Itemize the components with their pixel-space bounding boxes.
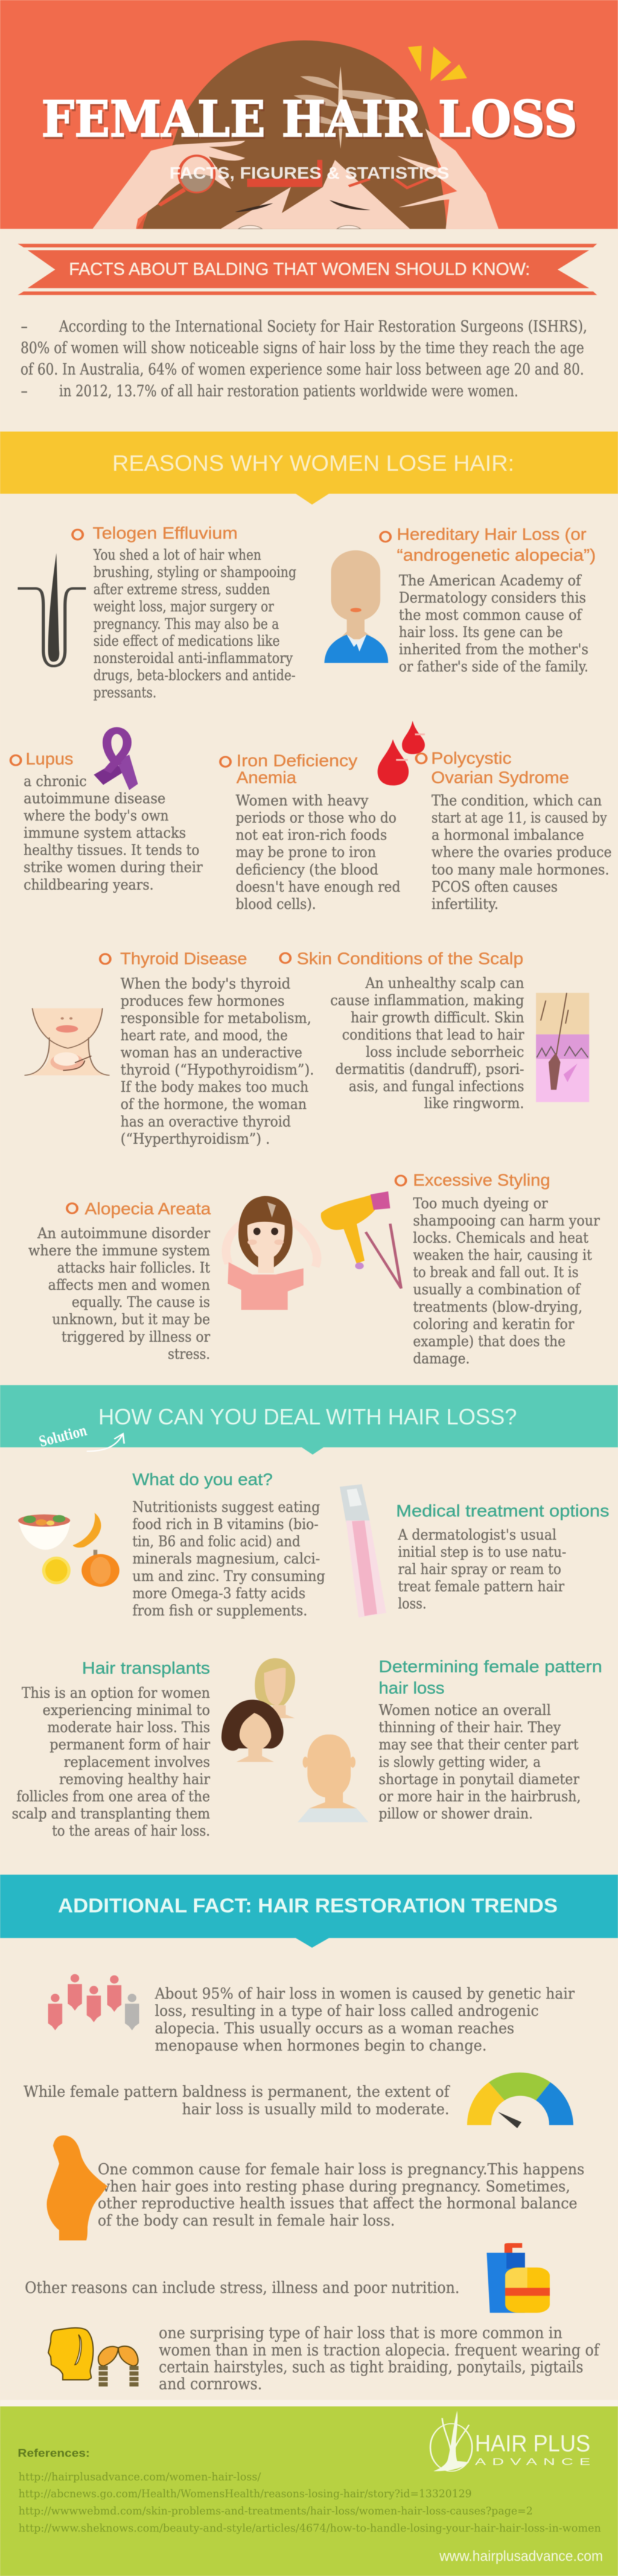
solution: hair transplants: permanent form of hair <box>49 1736 211 1753</box>
reason: thyroid disease: has an overactive thyroid <box>121 1114 291 1130</box>
subtitle: FACTS, FIGURES & STATISTICS <box>170 164 449 183</box>
solution: what do you eat: from fish or supplements. <box>132 1602 307 1619</box>
solution: hair transplants: This is an option for women <box>22 1685 210 1701</box>
solution: medical treatment options: A dermatologist's usual <box>398 1526 556 1543</box>
reason: excessive styling <box>396 1170 600 1367</box>
fact: pattern baldness <box>24 2083 450 2118</box>
reason: lupus: strike women during their <box>24 859 203 876</box>
reason: skin conditions of the scalp: like ringworm. <box>424 1095 524 1112</box>
footer panel <box>0 2400 618 2576</box>
reason: alopecia areata <box>28 1199 211 1362</box>
reason: alopecia areata: stress. <box>168 1346 210 1362</box>
icon: hair dryer and straightener <box>321 1191 401 1289</box>
reason: skin conditions of the scalp: hair growth difficult. Skin <box>351 1009 524 1026</box>
reason: iron deficiency anemia: blood cells). <box>235 896 316 913</box>
reason: skin conditions of the scalp: loss include seborrheic <box>366 1044 524 1060</box>
reference links: http://hairplusadvance.com/women-hair-loss/ <box>19 2470 261 2483</box>
reason: polycystic ovarian syndrome: PCOS often causes <box>432 879 558 895</box>
reason: telogen effluvium: Telogen Effluvium <box>92 523 238 542</box>
reason: lupus: childbearing years. <box>24 876 154 893</box>
icon: blood drops <box>378 721 425 785</box>
solution: hair transplants: scalp and transplanting them <box>12 1805 210 1822</box>
reason: alopecia areata: An autoimmune disorder <box>37 1225 211 1242</box>
logo: hair plus advance <box>430 2411 590 2471</box>
reason: telogen effluvium <box>72 523 296 701</box>
solution: hair transplants: to the areas of hair loss. <box>52 1823 210 1840</box>
reason: alopecia areata: where the immune system <box>28 1242 210 1259</box>
fact: traction alopecia: and cornrows. <box>159 2375 262 2393</box>
reason: alopecia areata: unknown, but it may be <box>52 1311 210 1328</box>
banner: facts about balding <box>18 244 597 295</box>
reason: alopecia areata: affects men and women <box>48 1277 210 1293</box>
icon: bald woman <box>324 550 388 663</box>
illustration: woman inspecting her scalp <box>92 40 499 229</box>
solution: what do you eat <box>132 1470 325 1619</box>
reason: thyroid disease: (“Hyperthyroidism”) . <box>121 1130 270 1147</box>
fact: genetic hair loss <box>154 1985 575 2055</box>
solution: hair transplants: follicles from one area of the <box>16 1788 210 1805</box>
solution: medical treatment options <box>396 1501 610 1612</box>
reason: iron deficiency anemia: periods or those who do <box>235 809 397 826</box>
reason: thyroid disease: responsible for metabolism, <box>121 1010 311 1027</box>
section band: reasons: REASONS WHY WOMEN LOSE HAIR: <box>112 451 514 476</box>
reason: polycystic ovarian syndrome: infertility. <box>432 896 499 913</box>
reason: telogen effluvium: after extreme stress, sudden <box>94 581 270 598</box>
reason: lupus: where the body's own <box>24 808 168 824</box>
solution: hair transplants: replacement involves <box>64 1754 210 1770</box>
text: balding facts: - <box>21 383 28 400</box>
section band: how to deal <box>0 1385 618 1455</box>
solution: hair transplants: removing healthy hair <box>59 1771 211 1788</box>
solution: what do you eat: Nutritionists suggest eating <box>132 1499 320 1516</box>
icon: worried woman <box>226 1196 317 1310</box>
solution: determining female pattern hair loss <box>379 1657 602 1822</box>
reason: telogen effluvium: weight loss, major surgery or <box>94 598 274 615</box>
solution: what do you eat: food rich in B vitamins (bio- <box>132 1516 319 1533</box>
reason: lupus: Lupus <box>25 749 73 768</box>
icon: shampoo bottles <box>486 2243 550 2313</box>
reason: telogen effluvium: pregnancy. This may also be a <box>94 616 279 633</box>
reason: thyroid disease: woman has an underactive <box>121 1044 302 1061</box>
reason: iron deficiency anemia: Women with heavy <box>235 792 369 809</box>
text: balding facts <box>21 318 587 400</box>
reason: alopecia areata: triggered by illness or <box>62 1328 211 1345</box>
reason: iron deficiency anemia <box>220 751 400 913</box>
reason: skin conditions of the scalp: dermatitis (dandruff), psori- <box>336 1061 524 1078</box>
reason: telogen effluvium: side effect of medications like <box>94 633 280 649</box>
reason: alopecia areata: attacks hair follicles. It <box>57 1260 210 1277</box>
reference links <box>19 2470 601 2534</box>
solution: determining female pattern hair loss: Women notice an overall <box>379 1702 551 1719</box>
solution: what do you eat: more Omega-3 fatty acids <box>132 1585 305 1602</box>
reason: thyroid disease: of the hormone, the woman <box>121 1096 307 1113</box>
icon: pregnant silhouette <box>46 2135 107 2240</box>
reason: iron deficiency anemia: doesn't have enough red <box>235 879 400 895</box>
reason: telogen effluvium: brushing, styling or shampooing <box>94 564 296 581</box>
solution: hair transplants: moderate hair loss. This <box>47 1719 210 1736</box>
fact: pregnancy <box>98 2161 584 2230</box>
solution: hair transplants: Hair transplants <box>82 1659 210 1677</box>
reason: iron deficiency anemia: Iron Deficiency <box>237 751 358 770</box>
icon: neck with thyroid <box>24 1008 110 1076</box>
icon: treatment bottle <box>340 1484 386 1618</box>
reason: skin conditions of the scalp: cause inflammation, making <box>330 992 524 1009</box>
reason: thyroid disease: produces few hormones <box>121 993 284 1009</box>
references heading: References: <box>18 2447 90 2460</box>
reason: iron deficiency anemia: not eat iron-rich foods <box>235 827 387 844</box>
text: balding facts: - <box>21 318 28 336</box>
reason: alopecia areata: equally. The cause is <box>72 1294 210 1311</box>
reason: thyroid disease: If the body makes too much <box>121 1079 308 1095</box>
reason: hereditary hair loss <box>380 524 596 675</box>
reason: polycystic ovarian syndrome: Ovarian Sydrome <box>431 768 569 786</box>
reason: skin conditions of the scalp: asis, and fungal infections <box>349 1078 524 1095</box>
reason: skin conditions of the scalp: Skin Conditions of the Scalp <box>297 949 523 968</box>
reason: telogen effluvium: pressants. <box>94 684 156 701</box>
reason: lupus: immune system attacks <box>24 824 186 841</box>
reason: thyroid disease: Thyroid Disease <box>120 949 247 968</box>
reason: excessive styling: Too much dyeing or <box>413 1195 548 1212</box>
solution: determining female pattern hair loss: pillow or shower drain. <box>379 1805 533 1822</box>
icon: hair follicle <box>18 553 86 666</box>
solution: what do you eat: tin, B6 and folic acid) and <box>132 1533 301 1550</box>
section band: additional fact <box>0 1875 618 1948</box>
reason: iron deficiency anemia: deficiency (the blood <box>235 861 378 878</box>
solution: determining female pattern hair loss: hair loss <box>379 1679 445 1697</box>
reason: skin conditions of the scalp <box>280 949 524 1112</box>
reason: telogen effluvium: drugs, beta-blockers and antide- <box>94 667 296 684</box>
icon: group of women <box>48 1974 139 2030</box>
section band: reasons <box>0 432 618 505</box>
reason: skin conditions of the scalp: An unhealthy scalp can <box>365 975 524 992</box>
icon: yellow burst <box>408 46 467 81</box>
solution: medical treatment options: loss. <box>398 1595 427 1612</box>
solution label with arrow: Solution <box>36 1423 90 1450</box>
icon: fruit and vegetables <box>18 1513 119 1587</box>
reason: thyroid disease: heart rate, and mood, the <box>121 1027 288 1044</box>
reason: thyroid disease: When the body's thyroid <box>121 975 290 992</box>
reason: iron deficiency anemia: Anemia <box>237 768 296 786</box>
logo: hair plus advance: ADVANCE <box>475 2456 590 2467</box>
reason: polycystic ovarian syndrome <box>416 748 611 913</box>
reason: iron deficiency anemia: may be prone to iron <box>235 844 376 861</box>
solution: hair transplants <box>12 1659 211 1840</box>
reason: lupus: a chronic <box>24 773 87 790</box>
reason: lupus <box>11 749 203 893</box>
icon: three heads with different hair <box>221 1658 369 1822</box>
reason: thyroid disease <box>100 949 314 1147</box>
reason: telogen effluvium: You shed a lot of hair when <box>93 547 261 564</box>
reason: lupus: healthy tissues. It tends to <box>24 842 199 859</box>
reason: lupus: autoimmune disease <box>24 790 165 807</box>
solution: what do you eat: um and zinc. Try consuming <box>132 1567 325 1584</box>
solution: what do you eat: minerals magnesium, calci- <box>132 1551 320 1567</box>
solution: hair transplants: experiencing minimal to <box>43 1702 210 1719</box>
icon: purple ribbon <box>94 730 138 790</box>
reason: polycystic ovarian syndrome: Polycystic <box>431 748 512 768</box>
hero panel <box>0 0 618 400</box>
icon: ponytail and braids <box>48 2328 138 2388</box>
solution: what do you eat: What do you eat? <box>132 1470 273 1489</box>
reason: excessive styling: damage. <box>413 1350 470 1367</box>
icon: scalp cross-section <box>536 993 589 1102</box>
reason: skin conditions of the scalp: conditions that lead to hair <box>342 1027 524 1044</box>
icon: gauge <box>467 2073 573 2128</box>
fact: traction alopecia <box>159 2324 600 2393</box>
reason: thyroid disease: thyroid (“Hypothyroidism”). <box>121 1062 314 1079</box>
reason: telogen effluvium: nonsteroidal anti-inflammatory <box>94 650 293 667</box>
reason: alopecia areata: Alopecia Areata <box>84 1199 211 1218</box>
solution: determining female pattern hair loss: is slowly getting wider, a <box>379 1754 541 1770</box>
reason: excessive styling: Excessive Styling <box>413 1170 550 1190</box>
